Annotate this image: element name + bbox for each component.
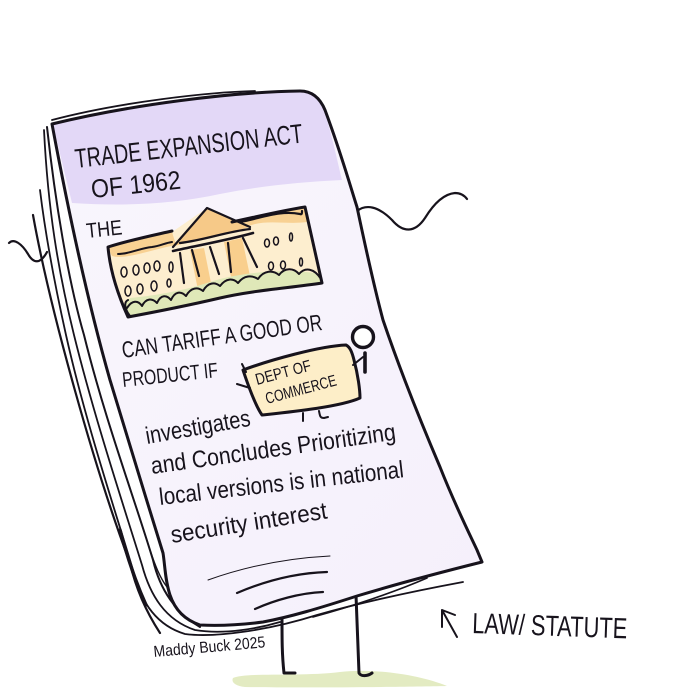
body text: investigates bbox=[143, 405, 252, 450]
page outline bbox=[52, 91, 482, 625]
icon: Capitol building banner bbox=[107, 207, 322, 317]
body text bbox=[143, 405, 405, 549]
title: TRADE EXPANSION ACT bbox=[73, 119, 304, 174]
character: Dept of Commerce with magnifying glass: DEPT OF bbox=[254, 358, 313, 389]
body text: and Concludes Prioritizing bbox=[149, 419, 397, 480]
arrow: pointing to document bbox=[442, 610, 457, 637]
body heading bbox=[120, 309, 324, 392]
character: Dept of Commerce with magnifying glass bbox=[237, 326, 374, 421]
page: front sheet bbox=[52, 91, 482, 625]
right arm bbox=[357, 193, 467, 230]
back pages bbox=[33, 127, 463, 635]
title bbox=[73, 119, 304, 204]
body text: security interest bbox=[169, 497, 329, 549]
credit: Maddy Buck 2025 bbox=[153, 634, 266, 661]
body heading: PRODUCT IF bbox=[121, 359, 219, 392]
body text: local versions is in national bbox=[158, 456, 405, 511]
label: the: THE bbox=[85, 216, 123, 243]
label: law / statute: LAW/ STATUTE bbox=[472, 608, 628, 645]
body heading: CAN TARIFF A GOOD OR bbox=[120, 309, 324, 363]
ground shadow bbox=[232, 671, 447, 687]
page header band bbox=[53, 92, 342, 204]
page lines bbox=[208, 556, 330, 609]
left arm bbox=[9, 241, 47, 261]
character: Dept of Commerce with magnifying glass: COMMERCE bbox=[264, 373, 339, 408]
title: OF 1962 bbox=[89, 165, 182, 204]
legs bbox=[282, 595, 372, 676]
